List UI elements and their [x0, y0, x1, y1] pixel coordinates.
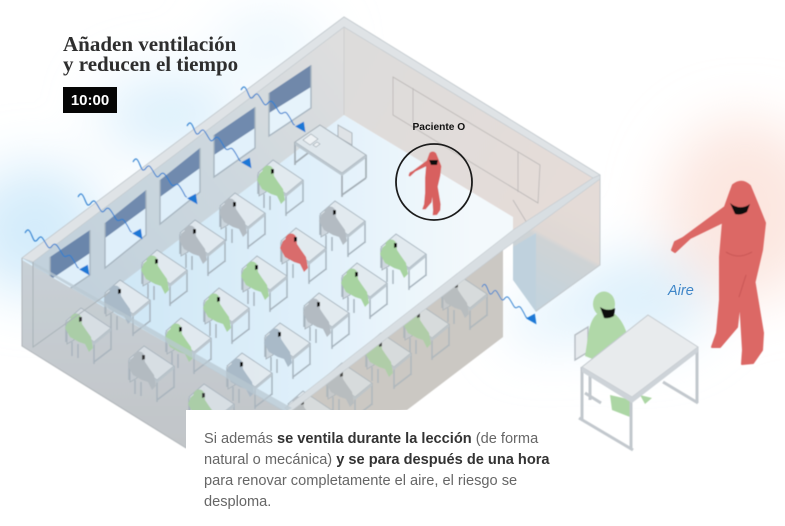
title: Añaden ventilación: [63, 32, 237, 56]
wall top edges: [22, 17, 600, 448]
student: [226, 353, 272, 409]
student: [341, 263, 387, 319]
label: Aire: Aire: [667, 283, 694, 299]
back wall: [344, 27, 593, 232]
student: [264, 323, 310, 379]
caption: desploma.: [204, 494, 271, 510]
student: [165, 318, 211, 374]
near left wall: [22, 260, 300, 500]
students row 1: [257, 160, 303, 216]
label: Paciente O: Paciente O: [412, 122, 465, 133]
student: [326, 363, 372, 419]
student: [219, 193, 265, 249]
student row 2: [319, 201, 365, 257]
student: [65, 308, 111, 364]
student: [179, 220, 225, 276]
door: [513, 233, 536, 312]
caption: [186, 410, 560, 526]
air flow arrows: [25, 87, 540, 324]
near wall floor tint right: [260, 250, 503, 420]
caption: para renovar completamente el aire, el riesgo se: [204, 473, 517, 489]
teacher desk: [295, 125, 366, 197]
student: [128, 346, 174, 402]
near wall floor tint left: [22, 260, 300, 500]
student: [104, 280, 150, 336]
student: [141, 250, 187, 306]
student row 4: [441, 274, 487, 330]
windows: [50, 65, 311, 302]
student: [287, 391, 333, 447]
timer: 10:00: [71, 92, 109, 109]
timer: [63, 87, 117, 113]
floor: [30, 115, 513, 420]
student: [241, 256, 287, 312]
student: [188, 384, 234, 440]
caption: natural o mecánica) y se para después de una hora: [204, 452, 550, 468]
large infected person: [672, 182, 765, 364]
student: [203, 288, 249, 344]
infected student: [280, 228, 326, 284]
title line 2: y reducen el tiempo: [63, 52, 238, 76]
window wall: [33, 27, 344, 350]
highlight circle: [396, 144, 472, 220]
caption: Si además se ventila durante la lección (de forma: [204, 431, 538, 447]
background air glows: [0, 20, 785, 345]
patient zero figure: [409, 152, 441, 215]
near right wall: [260, 250, 503, 420]
student: [403, 304, 449, 360]
student: [365, 333, 411, 389]
large desk with student: [575, 292, 698, 450]
student: [303, 293, 349, 349]
right end wall: [513, 178, 600, 312]
student row 3: [380, 234, 426, 290]
